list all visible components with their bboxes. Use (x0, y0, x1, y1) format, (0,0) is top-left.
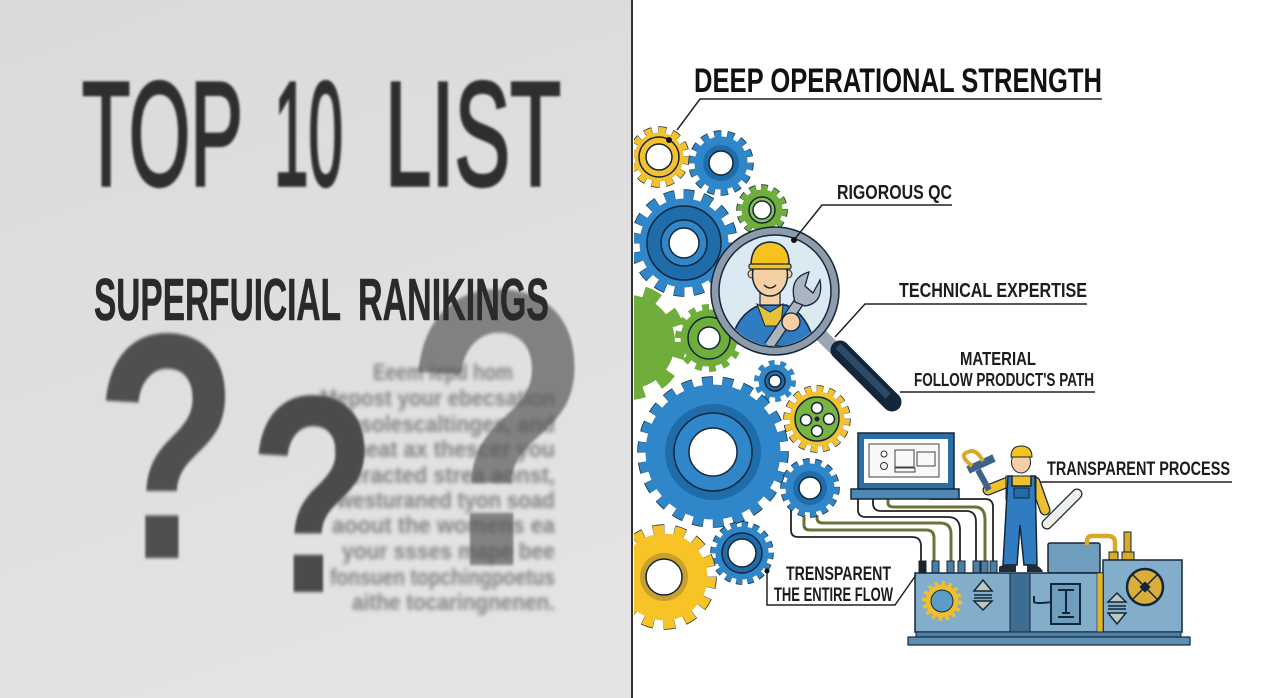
blurred body text: your ssses mape bee (342, 538, 555, 564)
gear: small blue, middle (756, 362, 794, 400)
leader line: material (900, 391, 1095, 393)
title: top 10 list: TOP (82, 52, 243, 217)
icon: worker with wrench and scroll (964, 446, 1077, 572)
blurred body text: seracted strea aonst, (338, 462, 555, 488)
blurred body text: fonsuen topchingpoetus (330, 564, 555, 590)
blurred body text (320, 359, 555, 615)
title: top 10 list (82, 52, 561, 217)
title: top 10 list: LIST (385, 52, 561, 217)
worker arms (988, 482, 1008, 490)
label: trensparent: TRENSPARENT (786, 564, 891, 585)
machine gear dial (924, 583, 960, 619)
gear: blue, lower right (784, 462, 836, 514)
divider (631, 0, 633, 698)
label: the entire flow: THE ENTIRE FLOW (774, 585, 893, 606)
worker bust (730, 242, 821, 346)
gear: yellow, top (632, 130, 686, 184)
blurred body text: emeat ax thescer you (335, 436, 555, 462)
icon: machine (908, 532, 1190, 645)
gear: large green, left (634, 286, 685, 400)
question mark: right, faded: ? (404, 208, 592, 650)
label: technical expertise: TECHNICAL EXPERTISE (899, 280, 1087, 302)
machine control panel (1034, 584, 1080, 624)
gear: huge blue (642, 381, 784, 523)
blurred body text: Mepost your ebecsation (320, 385, 555, 411)
leader line: transparent process (1040, 481, 1232, 483)
leader line: rigorous qc (791, 205, 952, 243)
heading: deep operational strength: DEEP OPERATIONAL STRENGTH (694, 62, 1102, 100)
gear: small green (740, 188, 784, 232)
label: rigorous qc: RIGOROUS QC (837, 182, 952, 204)
gear: green, middle (678, 307, 740, 369)
heading: superficial rankings: RANIKINGS (358, 267, 549, 333)
icon: magnifying glass with worker (711, 227, 892, 402)
blurred body text: aithe tocaringnenen. (352, 589, 555, 615)
machine top box (1048, 543, 1100, 573)
leader line: heading to gear (666, 99, 1102, 143)
worker boots (999, 564, 1043, 572)
leader line: technical expertise (835, 304, 1087, 337)
gear: blue, top (692, 134, 750, 192)
machine dial (1127, 569, 1163, 605)
gear: yellow and green wheel (787, 389, 847, 449)
hand tool (964, 451, 994, 490)
panel: left, superficial rankings (0, 0, 632, 698)
icon: laptop (851, 433, 959, 499)
heading: superficial rankings: SUPERFUICIAL (94, 267, 341, 333)
blurred body text: aoout the womens ea (332, 512, 555, 538)
gear: large yellow, bottom (616, 530, 712, 624)
label: material: MATERIAL (960, 349, 1036, 369)
blurred body text: Eeem iepd hom (373, 359, 513, 385)
magnifier handle (821, 335, 892, 402)
callout: transparent the entire flow (764, 564, 916, 606)
worker body and overalls (1006, 476, 1036, 500)
title: top 10 list: 10 (274, 52, 343, 217)
question mark: middle: ? (249, 336, 376, 652)
worker head (1012, 451, 1030, 473)
label: follow product's path: FOLLOW PRODUCT'S PATH (914, 370, 1094, 390)
blurred body text: westuraned tyon soad (336, 487, 555, 513)
gear: blue, bottom (714, 524, 770, 582)
blurred body text: resolescaltinges, and (340, 411, 555, 437)
magnifier lens (715, 231, 835, 351)
scroll (1047, 494, 1077, 524)
question mark: left: ? (95, 267, 239, 627)
yellow pipes (1087, 532, 1134, 560)
gear cluster (634, 126, 994, 630)
wire connectors (919, 561, 997, 573)
machine arrows (974, 580, 1126, 624)
wires from gears and laptop to the machine (791, 499, 993, 562)
gear: big blue, upper (636, 194, 732, 292)
